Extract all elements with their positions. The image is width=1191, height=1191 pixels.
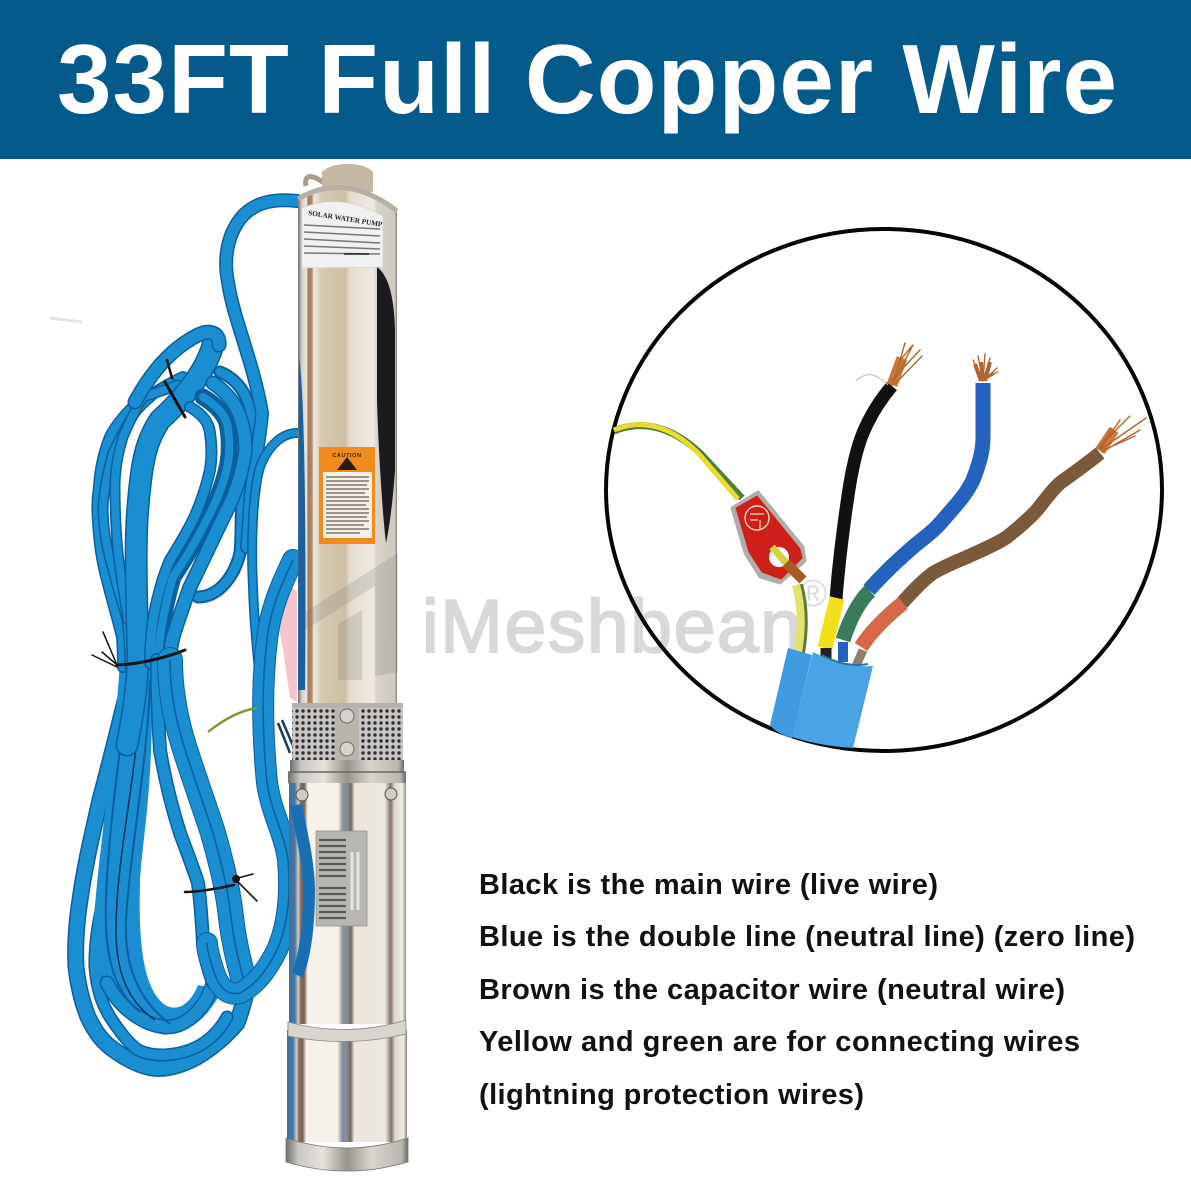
cable ties (92, 360, 257, 901)
top cap and handle (306, 164, 373, 192)
caution sticker: CAUTION (332, 453, 362, 459)
perforated intake screen (292, 703, 403, 760)
caution sticker (319, 447, 375, 544)
brown wire (902, 453, 1100, 603)
legend: yellow and green: Yellow and green are for connecting wires (479, 1026, 1080, 1058)
cable strands (76, 200, 297, 1068)
legend: brown: Brown is the capacitor wire (neutral wire) (479, 974, 1065, 1006)
product label: SOLAR WATER PUMP (308, 209, 383, 229)
stray specks (50, 318, 82, 322)
legend: blue: Blue is the double line (neutral line) (zero line) (479, 921, 1135, 953)
upper pump body (298, 187, 397, 708)
coiled blue cable (76, 200, 297, 1068)
lower pump body (289, 783, 406, 1024)
red ring lug (732, 492, 805, 583)
collar rings (288, 760, 406, 784)
blue wire (869, 383, 983, 590)
dark blue reflection (298, 358, 305, 690)
sleeves (825, 591, 903, 666)
base section (286, 1020, 408, 1171)
copper strands (856, 343, 1146, 452)
watermark: pink logo fragment (274, 577, 297, 702)
watermark: grey logo over pump (305, 553, 398, 680)
watermark: iMeshbean wordmark: iMeshbean (422, 584, 802, 668)
wire colour legend (479, 869, 1135, 1111)
motor data sticker (316, 831, 367, 926)
inset circle: wire close-up (606, 229, 1162, 751)
circle outline (606, 229, 1162, 751)
flat blue sheath (770, 648, 873, 748)
submersible pump (286, 164, 408, 1171)
title banner (0, 0, 1191, 159)
product label (302, 202, 383, 268)
watermark: registered mark: ® (799, 573, 827, 615)
legend: black: Black is the main wire (live wire) (479, 869, 938, 901)
title banner: 33FT Full Copper Wire (57, 24, 1117, 134)
yellow-green earth wire (614, 425, 803, 653)
dark reflection strip (377, 267, 395, 543)
black wire (836, 386, 892, 600)
legend: lightning protection: (lightning protection wires) (479, 1079, 864, 1111)
stray green wire (208, 708, 257, 732)
